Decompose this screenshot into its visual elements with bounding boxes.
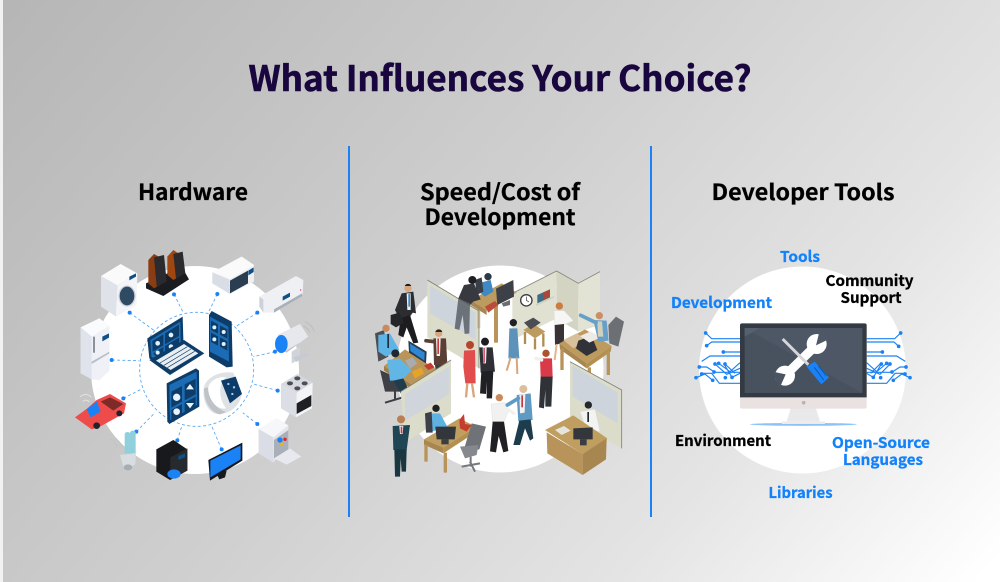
icon: wrench and screwdriver [773,332,830,389]
icon: light bulb [111,431,136,470]
people: left desk pair [375,325,412,403]
heading: hardware: Hardware [138,175,248,207]
person: walking with briefcase [391,284,418,343]
label: open-source languages: Open-Source [832,432,930,453]
icon: laptop [147,317,204,375]
icon: air conditioner [259,276,303,313]
printer table [523,318,545,349]
label: open-source languages: Languages [843,449,923,470]
divider: right [650,146,652,517]
people: couple talking [463,338,495,398]
panel: developer tools [671,175,930,503]
desk: left with computer [384,341,438,408]
desk: right with laptop [559,329,612,387]
label: libraries: Libraries [768,482,832,503]
circuit nodes: left [694,331,734,382]
label: environment: Environment [675,430,772,451]
label: development: Development [671,292,773,313]
illustration: busy office [375,271,624,477]
label: tools: Tools [780,246,820,267]
icon: speakers [146,250,189,296]
label: community support: Support [840,287,902,308]
icon: security camera [275,322,314,363]
circuit nodes: right [871,331,912,382]
person: man at right desk [581,312,624,347]
icon: coffee machine [156,440,187,480]
icon: car [75,394,126,429]
divider: left [348,146,350,517]
white circle: hardware [91,266,299,474]
person: presenting man [426,329,447,388]
icon: fridge [81,318,109,380]
label: community support: Community [826,270,914,291]
circuit traces: left [696,333,740,383]
people: back desk pair [455,273,493,334]
icon: television [208,443,242,481]
desk: front right [545,401,607,475]
monitor [740,323,867,426]
office chair [460,423,486,472]
partition: left glass [427,280,479,368]
icon: tablet [167,368,199,424]
panel: hardware [75,175,314,481]
illustration: connected devices [75,250,314,481]
white circle: office [396,266,604,472]
illustration: monitor with tools [694,323,912,426]
people: handshake [490,385,533,452]
network nodes [110,292,280,451]
heading: speed and cost of development: Speed/Cost of [420,175,581,207]
white circle: developer tools [699,266,906,474]
person: woman in white [554,302,573,360]
icon: dishwasher [259,418,301,465]
person: man in red vest [536,350,553,408]
icon: washing machine [101,264,137,317]
desk: front left [424,405,476,473]
desk: back with monitor [471,280,517,343]
partition: right glass [570,362,622,448]
icon: smart ring [203,372,242,414]
office back walls [512,271,600,340]
heading: developer tools: Developer Tools [712,175,895,207]
icon: phone [209,311,233,367]
person: woman in blue [507,319,519,374]
icon: cooker [281,374,313,417]
icon: microwave [212,257,254,294]
title: What Influences Your Choice? [248,51,752,102]
network lines [112,294,278,449]
heading: speed and cost of development: Development [424,200,576,232]
circuit traces: right [867,333,910,383]
partition: front left glass [401,360,451,443]
person: man on phone [393,415,410,477]
panel: speed and cost of development [375,175,624,477]
